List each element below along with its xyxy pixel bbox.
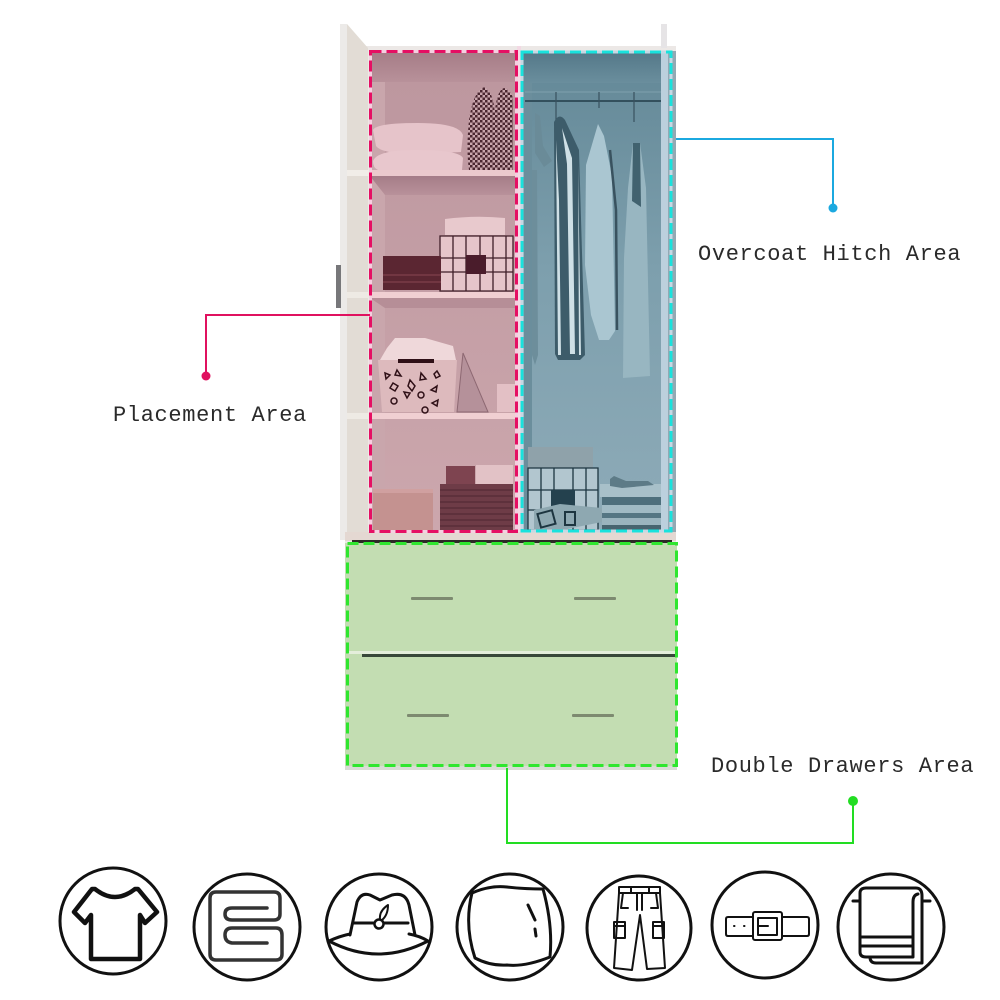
callout: overcoat hitch area	[676, 139, 961, 267]
wardrobe	[336, 24, 676, 544]
icon: pillow	[457, 874, 563, 980]
icon: hat	[326, 874, 432, 980]
drawer fronts	[345, 543, 677, 769]
open left door	[340, 24, 370, 540]
open right door edge	[661, 24, 667, 48]
wardrobe body frame	[345, 46, 676, 543]
icon: towel	[838, 874, 944, 980]
callout: double drawers area	[507, 754, 974, 843]
folded towels stack	[600, 484, 661, 497]
right compartment	[521, 51, 676, 532]
panel: drawers	[345, 543, 677, 770]
centre divider	[517, 46, 521, 536]
icon: t-shirt	[60, 868, 166, 974]
double drawers dashed outline	[348, 544, 676, 766]
icon: belt	[712, 872, 818, 978]
dark basket	[440, 484, 513, 531]
striped coat	[554, 116, 585, 360]
folded towels and wire basket	[445, 217, 505, 235]
belt on left	[535, 113, 552, 167]
callout: placement area	[113, 315, 370, 428]
icon: cargo pants	[587, 876, 691, 980]
callout: placement area: Placement Area	[113, 403, 307, 428]
placement area dashed outline	[370, 52, 516, 532]
triangular file	[457, 353, 488, 412]
left compartment	[370, 51, 517, 532]
houndstooth cushions	[468, 87, 495, 170]
long dress	[623, 143, 650, 378]
round box	[373, 490, 433, 531]
light coat	[585, 124, 615, 340]
left door handle	[336, 265, 341, 308]
hanging rail	[525, 100, 661, 102]
hanger hooks	[556, 92, 634, 122]
dark folded clothes	[383, 256, 441, 290]
drawer handles	[411, 597, 453, 600]
callout: overcoat hitch area: Overcoat Hitch Area	[698, 242, 961, 267]
basket with bag	[528, 447, 593, 469]
base strip	[345, 532, 676, 541]
callout: double drawers area: Double Drawers Area	[711, 754, 974, 779]
shelves	[370, 176, 517, 195]
pillows	[373, 123, 463, 154]
overcoat area dashed outline	[522, 52, 671, 531]
patterned box	[378, 360, 457, 412]
icon: folded clothes	[194, 874, 300, 980]
